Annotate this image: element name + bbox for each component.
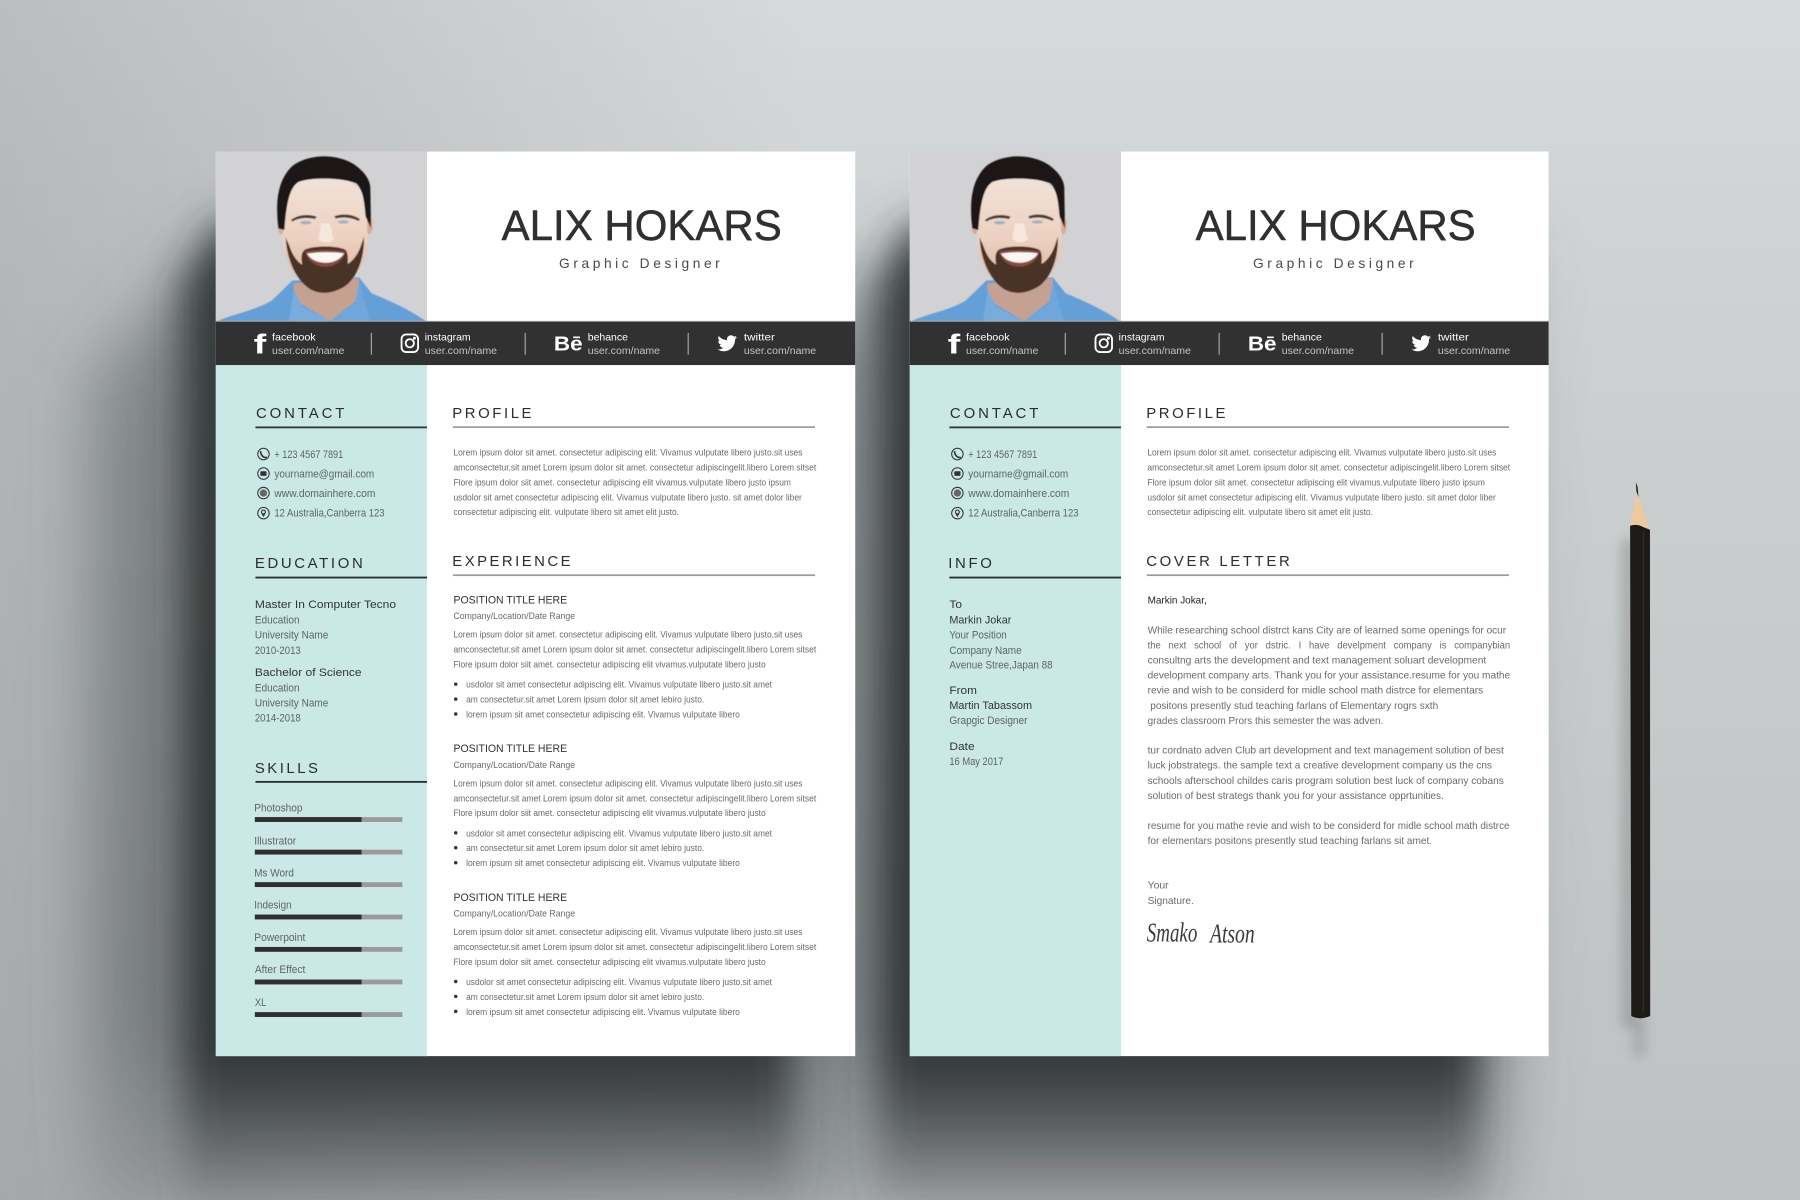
info: from: Martin Tabassom bbox=[949, 700, 1032, 712]
job entry one: Lorem ipsum dolor sit amet. consectetur adipiscing elit. Vivamus vulputate libero justo.sit uses bbox=[453, 630, 803, 641]
job entry one: lorem ipsum sit amet consectetur adipiscing elit. Vivamus vulputate libero bbox=[466, 709, 740, 720]
profile text: Flore ipsum dolor siit amet. consectetur adipiscing elit vivamus.vulputate libero justo ipsum bbox=[453, 477, 791, 488]
job entry two: Lorem ipsum dolor sit amet. consectetur adipiscing elit. Vivamus vulputate libero justo.sit uses bbox=[453, 778, 803, 789]
signature: Smako bbox=[1147, 916, 1197, 947]
job entry two: usdolor sit amet consectetur adipiscing elit. Vivamus vulputate libero justo.sit amet bbox=[466, 828, 772, 839]
letter paragraph one: positons presently stud teaching farlans of Elementary rogrs sxth bbox=[1150, 701, 1438, 712]
panel: cover letter page bbox=[910, 152, 1549, 1056]
degree one: University Name bbox=[255, 629, 328, 641]
letter paragraph two: tur cordnato adven Club art development and text management solution of best bbox=[1148, 746, 1504, 757]
contact section: CONTACT bbox=[950, 405, 1038, 422]
contact email: yourname@gmail.com bbox=[968, 468, 1068, 480]
profile text: consectetur adipiscing elit. vulputate libero sit amet elit justo. bbox=[453, 507, 679, 518]
skill: photoshop bbox=[254, 803, 402, 822]
panel: resume page bbox=[216, 152, 855, 1056]
contact section bbox=[255, 405, 427, 520]
job entry one: amconsectetur.sit amet Lorem ipsum dolor sit amet. consectetur adipiscingelit.libero Lorem sitset bbox=[453, 645, 816, 656]
icon: instagram bbox=[1095, 334, 1112, 352]
behance link: user.com/name bbox=[588, 346, 660, 357]
profile section: PROFILE bbox=[1146, 405, 1225, 422]
skill: xl: XL bbox=[255, 997, 266, 1009]
contact section bbox=[949, 405, 1121, 520]
skill: xl bbox=[255, 997, 402, 1017]
job entry three: lorem ipsum sit amet consectetur adipiscing elit. Vivamus vulputate libero bbox=[466, 1007, 740, 1018]
cover letter section bbox=[1146, 553, 1510, 948]
letter paragraph one: the next school of yor dstric. I have develpment company is companybian bbox=[1148, 641, 1510, 652]
twitter link bbox=[1438, 332, 1510, 357]
letter paragraph one: grades classroom Prors this semester the was adven. bbox=[1148, 716, 1383, 727]
skill: ms word bbox=[254, 867, 402, 887]
degree two: 2014-2018 bbox=[255, 712, 301, 724]
profile text: Flore ipsum dolor siit amet. consectetur adipiscing elit vivamus.vulputate libero justo ipsum bbox=[1147, 477, 1485, 488]
info section: INFO bbox=[948, 555, 992, 572]
sign off bbox=[1148, 881, 1194, 907]
info: from bbox=[949, 685, 1032, 727]
signature: Atson bbox=[1209, 917, 1255, 948]
job entry two: Company/Location/Date Range bbox=[453, 760, 575, 771]
skill: indesign bbox=[254, 900, 402, 919]
icon: facebook: f bbox=[254, 329, 267, 360]
profile text: usdolor sit amet consectetur adipiscing elit. Vivamus vulputate libero justo. sit amet dolor liber bbox=[1147, 492, 1496, 503]
portrait photo bbox=[910, 152, 1121, 321]
job entry three bbox=[453, 892, 816, 1018]
degree one: Master In Computer Tecno bbox=[255, 599, 396, 611]
info: to: Markin Jokar bbox=[949, 614, 1012, 626]
job entry two: POSITION TITLE HERE bbox=[453, 743, 567, 755]
job entry three: Lorem ipsum dolor sit amet. consectetur adipiscing elit. Vivamus vulputate libero justo.sit uses bbox=[453, 927, 803, 938]
degree one: 2010-2013 bbox=[255, 645, 301, 657]
instagram link: instagram bbox=[1119, 332, 1165, 343]
profile section: PROFILE bbox=[452, 405, 532, 422]
skill: ms word: Ms Word bbox=[254, 867, 294, 879]
info: to: Your Position bbox=[949, 629, 1007, 641]
facebook link bbox=[272, 332, 345, 357]
icon: instagram bbox=[402, 334, 418, 352]
job entry one: usdolor sit amet consectetur adipiscing elit. Vivamus vulputate libero justo.sit amet bbox=[466, 680, 772, 691]
facebook link bbox=[966, 332, 1039, 357]
cover letter section: COVER LETTER bbox=[1146, 553, 1290, 570]
job entry two: amconsectetur.sit amet Lorem ipsum dolor sit amet. consectetur adipiscingelit.libero Lorem sitset bbox=[453, 793, 816, 804]
skill: illustrator bbox=[254, 835, 402, 855]
job entry three: Flore ipsum dolor siit amet. consectetur adipiscing elit vivamus.vulputate libero justo bbox=[453, 957, 766, 968]
letter paragraph one: revie and wish to be considerd for midle school math distrce for elementars bbox=[1148, 685, 1483, 696]
letter paragraph three: for elementars positons presently stud teaching farlans sit amet. bbox=[1148, 836, 1432, 847]
job entry one: am consectetur.sit amet Lorem ipsum dolor sit amet lebiro justo. bbox=[466, 695, 704, 706]
profile section bbox=[452, 405, 816, 518]
contact phone: + 123 4567 7891 bbox=[968, 449, 1037, 461]
facebook link: facebook bbox=[272, 332, 317, 343]
pencil bbox=[1622, 482, 1650, 1056]
degree one: Education bbox=[255, 614, 300, 626]
job entry two: am consectetur.sit amet Lorem ipsum dolor sit amet lebiro justo. bbox=[466, 843, 704, 854]
profile text: amconsectetur.sit amet Lorem ipsum dolor sit amet. consectetur adipiscingelit.libero Lorem sitset bbox=[1147, 462, 1510, 473]
info: to bbox=[949, 599, 1053, 672]
letter paragraph one bbox=[1148, 626, 1510, 727]
job entry one: Company/Location/Date Range bbox=[453, 611, 575, 622]
degree two: University Name bbox=[255, 698, 328, 710]
letter paragraph two: solution of best strategs thank you for your assistance opprtunities. bbox=[1148, 791, 1444, 802]
job entry one: Flore ipsum dolor siit amet. consectetur adipiscing elit vivamus.vulputate libero justo bbox=[453, 660, 766, 671]
twitter link: twitter bbox=[1438, 332, 1469, 343]
letter paragraph one: development company arts. Thank you for your assistance.resume for you mathe bbox=[1148, 670, 1510, 681]
job entry one: POSITION TITLE HERE bbox=[453, 594, 567, 606]
sign off: Your bbox=[1148, 881, 1169, 892]
skill: illustrator: Illustrator bbox=[254, 835, 297, 847]
contact section: CONTACT bbox=[256, 405, 344, 422]
icon: behance: Bē bbox=[1248, 333, 1277, 356]
skill: powerpoint: Powerpoint bbox=[254, 932, 305, 944]
job entry two: lorem ipsum sit amet consectetur adipiscing elit. Vivamus vulputate libero bbox=[466, 858, 740, 869]
icon: facebook: f bbox=[948, 329, 961, 360]
instagram link: user.com/name bbox=[1119, 346, 1191, 357]
name heading: ALIX HOKARS bbox=[502, 202, 782, 249]
letter paragraph two: schools afterschool childes caris program solution best luck of company cobans bbox=[1148, 776, 1504, 787]
job entry one bbox=[453, 594, 816, 720]
icon: behance: Bē bbox=[554, 333, 583, 356]
info: from: Grapgic Designer bbox=[949, 715, 1028, 727]
contact website: www.domainhere.com bbox=[967, 488, 1069, 500]
letter paragraph three: resume for you mathe revie and wish to be considerd for midle school math distrce bbox=[1148, 821, 1510, 832]
instagram link bbox=[1119, 332, 1191, 357]
job entry two bbox=[453, 743, 816, 869]
instagram link bbox=[425, 332, 497, 357]
letter paragraph one: consultng arts the development and text management soluart development bbox=[1148, 656, 1486, 667]
job title: Graphic Designer bbox=[559, 256, 720, 271]
job entry three: usdolor sit amet consectetur adipiscing elit. Vivamus vulputate libero justo.sit amet bbox=[466, 977, 772, 988]
degree two: Education bbox=[255, 683, 300, 695]
name heading: ALIX HOKARS bbox=[1196, 202, 1476, 249]
profile text: Lorem ipsum dolor sit amet. consectetur adipiscing elit. Vivamus vulputate libero justo.sit uses bbox=[1147, 448, 1497, 459]
job entry three: POSITION TITLE HERE bbox=[453, 892, 567, 904]
contact phone bbox=[952, 448, 1037, 461]
skill: photoshop: Photoshop bbox=[254, 803, 302, 815]
facebook link: user.com/name bbox=[272, 346, 345, 357]
contact website: www.domainhere.com bbox=[273, 488, 375, 500]
behance link: user.com/name bbox=[1282, 346, 1354, 357]
skill: after effect bbox=[255, 964, 402, 984]
behance link: behance bbox=[588, 332, 628, 343]
info: date: 16 May 2017 bbox=[949, 756, 1003, 768]
facebook link: user.com/name bbox=[966, 346, 1039, 357]
contact address: 12 Australia,Canberra 123 bbox=[968, 508, 1079, 520]
skill: indesign: Indesign bbox=[254, 900, 292, 912]
social band bbox=[216, 321, 855, 365]
social band bbox=[910, 321, 1549, 365]
info: to: Avenue Stree,Japan 88 bbox=[949, 660, 1053, 672]
job entry two: Flore ipsum dolor siit amet. consectetur adipiscing elit vivamus.vulputate libero justo bbox=[453, 808, 766, 819]
info: to: Company Name bbox=[949, 645, 1022, 657]
facebook link: facebook bbox=[966, 332, 1010, 343]
info: from: From bbox=[949, 685, 977, 697]
info: date bbox=[949, 741, 1003, 768]
profile text bbox=[453, 448, 816, 518]
contact address: 12 Australia,Canberra 123 bbox=[274, 508, 385, 520]
contact phone bbox=[258, 448, 343, 461]
job entry three: am consectetur.sit amet Lorem ipsum dolor sit amet lebiro justo. bbox=[466, 992, 704, 1003]
skills section: SKILLS bbox=[255, 760, 318, 777]
skill: powerpoint bbox=[254, 932, 402, 952]
letter paragraph one: While researching school distrct kans City are of learned some openings for ocur bbox=[1148, 626, 1507, 637]
salutation: Markin Jokar, bbox=[1148, 595, 1207, 606]
profile section bbox=[1146, 405, 1510, 518]
letter paragraph two bbox=[1148, 746, 1504, 802]
twitter link: user.com/name bbox=[1438, 346, 1510, 357]
profile text: consectetur adipiscing elit. vulputate libero sit amet elit justo. bbox=[1147, 507, 1373, 518]
sign off: Signature. bbox=[1148, 896, 1194, 907]
instagram link: instagram bbox=[425, 332, 471, 343]
instagram link: user.com/name bbox=[425, 346, 497, 357]
twitter link: user.com/name bbox=[744, 346, 816, 357]
degree two bbox=[255, 667, 362, 724]
job title: Graphic Designer bbox=[1253, 256, 1414, 271]
icon: twitter bbox=[717, 335, 737, 351]
contact phone: + 123 4567 7891 bbox=[274, 449, 343, 461]
behance link: behance bbox=[1282, 332, 1322, 343]
portrait photo bbox=[216, 152, 427, 321]
profile text: amconsectetur.sit amet Lorem ipsum dolor sit amet. consectetur adipiscingelit.libero Lorem sitset bbox=[453, 462, 816, 473]
twitter link: twitter bbox=[744, 332, 776, 343]
twitter link bbox=[744, 332, 816, 357]
profile text: Lorem ipsum dolor sit amet. consectetur adipiscing elit. Vivamus vulputate libero justo.sit uses bbox=[453, 448, 803, 459]
profile text bbox=[1147, 448, 1510, 518]
letter paragraph two: luck jobstrategs. the sample text a creative development company us the cns bbox=[1148, 761, 1492, 772]
job entry three: Company/Location/Date Range bbox=[453, 908, 575, 919]
icon: twitter bbox=[1411, 335, 1431, 351]
skills section bbox=[254, 760, 427, 1017]
info: to: To bbox=[949, 599, 962, 611]
info: date: Date bbox=[949, 741, 975, 753]
skill: after effect: After Effect bbox=[255, 964, 305, 976]
letter paragraph three bbox=[1148, 821, 1510, 847]
education section: EDUCATION bbox=[255, 555, 363, 572]
behance link bbox=[588, 332, 660, 357]
contact email: yourname@gmail.com bbox=[274, 468, 374, 480]
degree one bbox=[255, 599, 396, 657]
profile text: usdolor sit amet consectetur adipiscing elit. Vivamus vulputate libero justo. sit amet dolor liber bbox=[453, 492, 803, 503]
behance link bbox=[1282, 332, 1354, 357]
education section bbox=[255, 555, 427, 724]
signature bbox=[1147, 916, 1255, 948]
experience section bbox=[452, 553, 816, 1018]
degree two: Bachelor of Science bbox=[255, 667, 362, 679]
info section bbox=[948, 555, 1121, 768]
job entry three: amconsectetur.sit amet Lorem ipsum dolor sit amet. consectetur adipiscingelit.libero Lorem sitset bbox=[453, 942, 816, 953]
experience section: EXPERIENCE bbox=[452, 553, 571, 570]
